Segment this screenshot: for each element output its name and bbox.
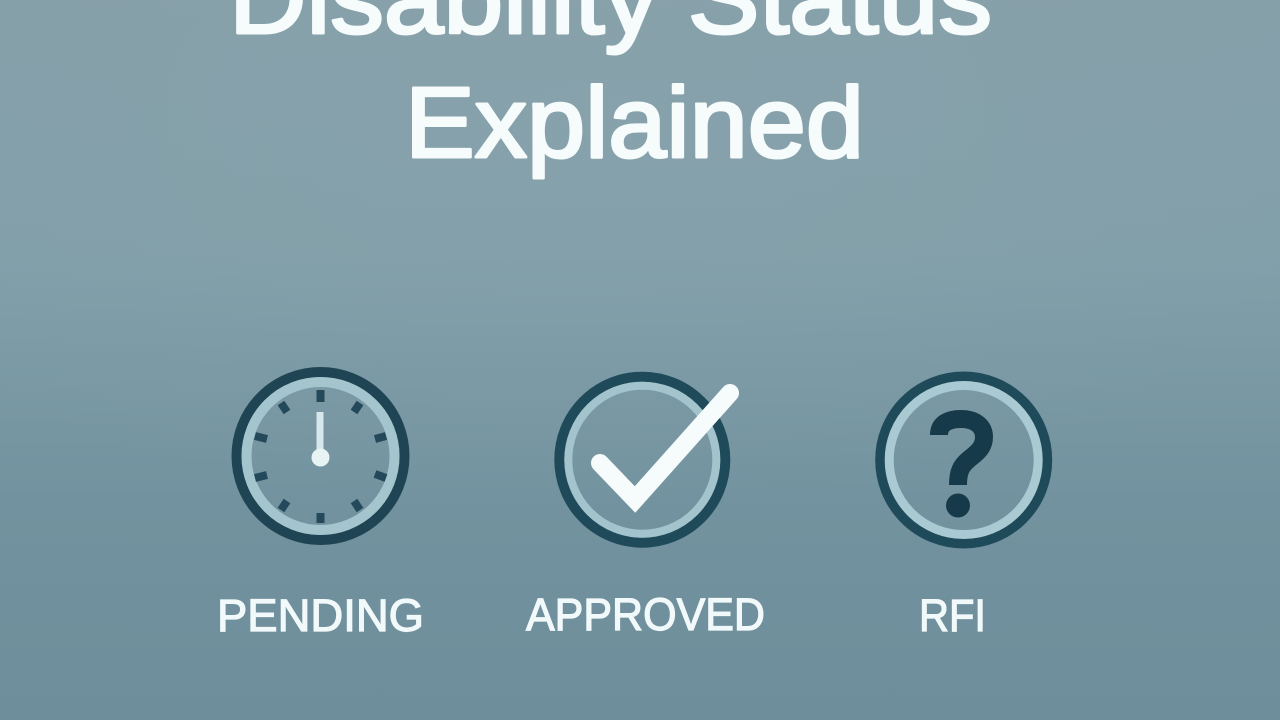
status: approved	[526, 377, 765, 640]
status: rfi	[880, 376, 1047, 641]
icon: question mark	[880, 376, 1047, 544]
status: pending	[217, 372, 424, 641]
icon: check mark	[559, 377, 730, 543]
label: pending: PENDING	[217, 590, 424, 641]
icon: clock	[236, 372, 404, 540]
title	[229, 0, 992, 179]
title: Explained	[405, 67, 864, 179]
label: approved: APPROVED	[526, 589, 765, 640]
label: rfi: RFI	[919, 590, 986, 641]
